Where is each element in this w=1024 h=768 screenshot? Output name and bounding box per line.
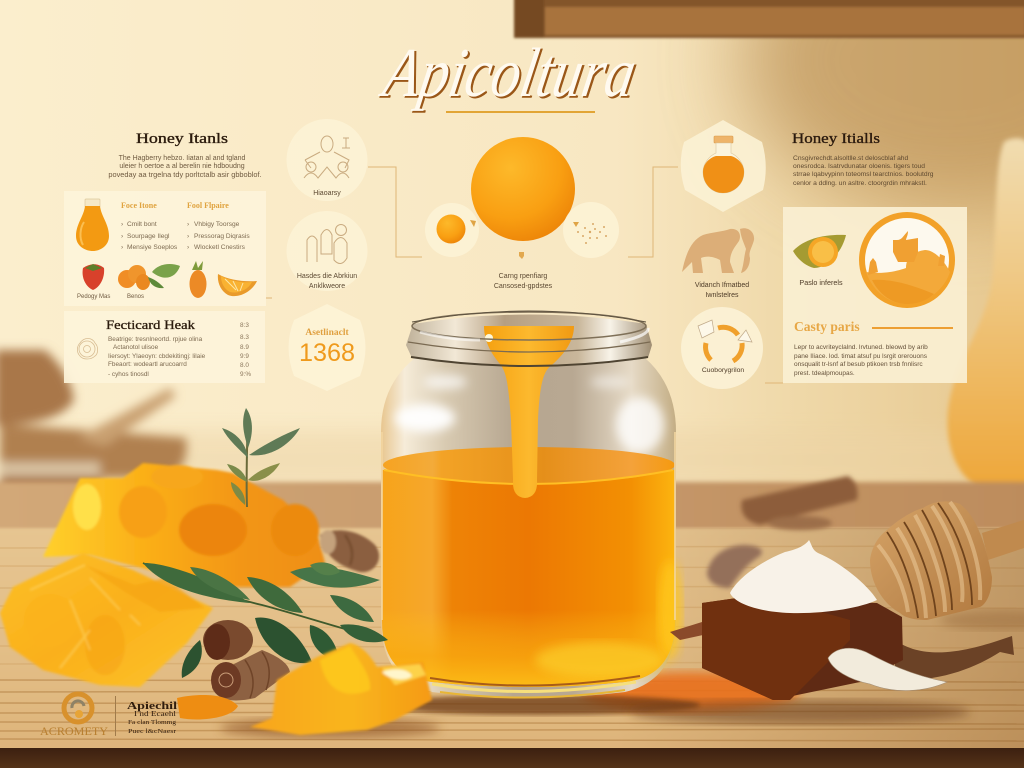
honey	[382, 470, 675, 687]
list items: ›	[187, 221, 189, 228]
list items: Pressorag Diqrasis	[194, 233, 250, 240]
panel: right card: Paslo inferels	[799, 278, 843, 287]
blurred bottle right	[947, 138, 1024, 492]
fact values: 8.9	[240, 344, 249, 351]
title: Apicoltura	[377, 36, 644, 113]
icon: orange slice	[218, 274, 257, 296]
honeycomb front chunk	[0, 553, 213, 687]
list headings: Foce Itone	[121, 201, 157, 210]
honey candy pieces	[250, 643, 432, 735]
honey pour	[484, 326, 574, 498]
hexagon badge: cycle	[681, 307, 763, 389]
list items: Mensiye Soeplos	[127, 244, 178, 251]
fact values: 8.0	[240, 362, 249, 369]
jar neck	[406, 314, 652, 367]
jar	[381, 311, 682, 698]
fact list: Actanotol ulisoe	[113, 344, 159, 351]
fact values: 8:3	[240, 322, 249, 329]
honey surface	[383, 447, 675, 483]
icon: carrot pineapple	[190, 261, 206, 298]
glass highlights	[395, 375, 664, 453]
list items: ›	[121, 221, 123, 228]
fruit labels: Pedogy Mas	[77, 294, 110, 300]
badge: statistic 1368: Asetlinaclt	[305, 328, 349, 338]
animal caption: Vidanch Ifmatbed	[695, 282, 749, 289]
pollen badge	[563, 202, 619, 258]
panel: facts: Fecticard Heak	[106, 318, 196, 332]
list items	[121, 221, 250, 251]
blurred cinnamon roll at back	[707, 476, 858, 588]
right heading block	[792, 131, 934, 187]
left heading block: poveday aa trgelna tdy porltctalb asir gbboblof.	[108, 170, 262, 179]
large sphere	[471, 137, 575, 241]
right heading block: strrae lqabvypinn toteomsl tearctnios. boolutdrg	[793, 171, 934, 178]
icon: elephant-like animal	[682, 228, 754, 273]
spoon	[828, 648, 947, 691]
connector lines	[266, 167, 783, 383]
icon: honey bottle small	[76, 199, 109, 251]
fact list: - cyhos tinosdl	[108, 371, 149, 378]
wooden shelf	[514, 0, 1024, 38]
fact list: Iiersoyt: Ylaeoyn: cbdekitingj: lilaie	[108, 353, 206, 360]
icon: strawberry	[83, 264, 104, 290]
panel: facts	[64, 311, 265, 383]
right heading block: Honey Itialls	[792, 131, 880, 147]
icon: round landscape	[862, 215, 952, 305]
list headings: Fool Flpaire	[187, 201, 229, 210]
list items: ›	[121, 233, 123, 240]
list items: Wlocketl Cnestirs	[194, 244, 246, 251]
blurred bowls left	[0, 350, 187, 526]
honey spill	[177, 695, 238, 720]
left hexagon badges	[286, 119, 368, 391]
badge: people: Hiaoarsy	[313, 190, 341, 197]
title underline	[446, 111, 595, 113]
list items: Cmilt bont	[127, 221, 157, 228]
small sphere badge	[425, 203, 479, 257]
herb sprig back	[222, 408, 300, 507]
herb sprig front	[143, 562, 388, 678]
left heading block: Honey Itanls	[136, 131, 228, 147]
list items: Sourpage Ilegl	[127, 233, 170, 240]
cinnamon small back	[320, 530, 379, 572]
left heading block: The Hagberry hebzo. Iiatan al and tgland	[119, 155, 246, 162]
icon: flower outline	[77, 338, 98, 359]
centre caption: Carng rpenfiarg	[499, 273, 547, 280]
right heading block: cenlor a ddlng. un asltre. ctoorgrdin mhrakstl.	[793, 180, 927, 187]
card body text: onsqualit tr-lsnf af besub ptikoen trsb fnnlisrc	[794, 361, 923, 368]
list headings	[121, 201, 229, 210]
jar side glass	[382, 432, 675, 620]
panel: fruits and lists	[64, 191, 266, 306]
icon: orange on leaf	[793, 235, 846, 268]
list items: Vhbigy Toorsge	[194, 221, 240, 228]
animal caption	[695, 282, 749, 299]
fact list: Fbeaort: wodeartl arucoarrd	[108, 361, 187, 368]
brownie block	[702, 598, 903, 700]
card body text: Lepr to acvriteyclalnd. lrvtuned. bleowd by arib	[794, 344, 928, 351]
jar rim lines	[408, 311, 650, 366]
honeycomb back	[43, 463, 325, 587]
badge: statistic 1368	[288, 304, 366, 391]
table shadows and honey glow	[220, 610, 1024, 738]
jar bottom rim	[430, 676, 640, 698]
fruit labels	[77, 294, 144, 300]
fact list	[108, 336, 206, 378]
logo mark	[64, 694, 92, 722]
animal caption: Iwnlstelres	[705, 292, 739, 299]
title: Apicoltura	[375, 34, 642, 112]
right heading block: onesrodca. Isatrvdunatar oloenis. tigers toud	[793, 163, 925, 170]
fact list: Beatrige: tresnlneortd. rpjue olina	[108, 336, 203, 343]
fact values: 9:%	[240, 371, 251, 378]
list items: ›	[121, 244, 123, 251]
logo: ACROMETY	[40, 724, 108, 738]
left heading block	[108, 131, 262, 179]
centre caption: Cansosed-gpdstes	[494, 283, 553, 290]
list items: ›	[187, 244, 189, 251]
logo: Puec l&cNaesr	[128, 728, 177, 735]
list items: ›	[187, 233, 189, 240]
jar glass body	[381, 358, 676, 698]
logo: I nd Ecaehl	[134, 710, 176, 718]
badge: statistic 1368: 1368	[299, 339, 355, 367]
card heading: Casty paris	[794, 319, 860, 334]
badge: people	[286, 119, 368, 201]
card body text	[794, 344, 928, 377]
honey dipper	[870, 501, 1024, 620]
logo: Apiechil	[127, 700, 177, 712]
wooden table	[0, 482, 1024, 768]
fruit labels: Benos	[127, 294, 144, 300]
fact values: 8.3	[240, 334, 249, 341]
badge: bottles: Anklkweore	[309, 283, 345, 290]
panel: right card	[783, 207, 967, 383]
hexagon badge: honey flask	[681, 120, 766, 212]
fact values	[240, 322, 251, 378]
logo: Fa clan Tlommg	[128, 719, 177, 726]
centre caption	[494, 273, 553, 290]
icon: apricots and leaf	[118, 264, 180, 290]
cinnamon rolls front	[203, 620, 290, 700]
right heading block: Cnsgivrechdt.alsoltlle.st deloscblaf ahd	[793, 155, 909, 162]
badge: bottles: Hasdes die Abrkiun	[297, 273, 357, 280]
card body text: pane Iliace. lod. timat atsuf pu lsrgit orerouons	[794, 353, 928, 360]
hexagon badge: cycle: Cuoborygrilon	[702, 367, 744, 374]
badge: bottles	[286, 211, 368, 291]
logo	[40, 694, 177, 738]
centre orange spheres	[425, 137, 619, 290]
left heading block: uleier h oertoe a al berelin nie hdboudng	[119, 163, 245, 170]
burlap cloth	[670, 622, 1014, 680]
white sugar mound	[730, 540, 877, 613]
card body text: prest. tdealpmoupas.	[794, 370, 855, 377]
fact values: 9:9	[240, 353, 249, 360]
